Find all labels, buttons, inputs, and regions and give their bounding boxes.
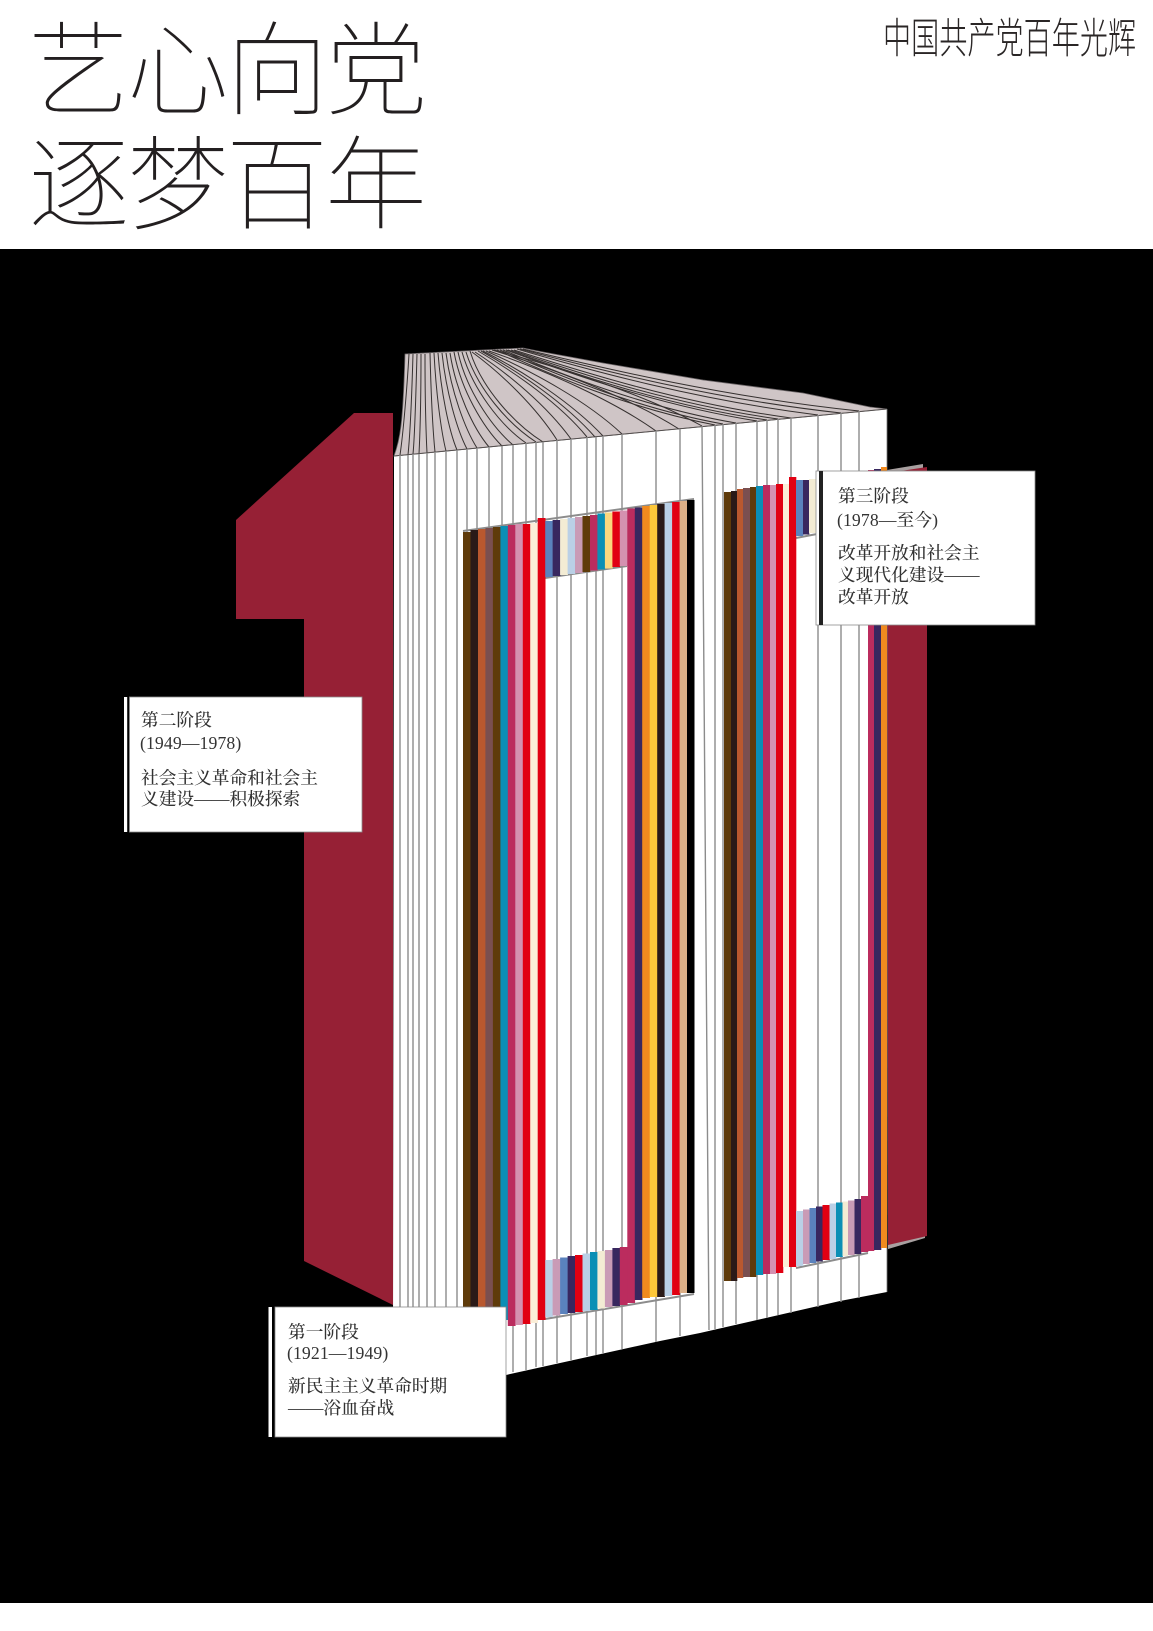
left zero striped numeral [463, 499, 694, 1326]
right zero: left column stripes [724, 477, 796, 1281]
callout: stage three: 改革开放 [838, 587, 909, 607]
callout: stage one: 第一阶段 [288, 1322, 359, 1342]
right zero striped numeral [724, 467, 887, 1281]
title: 艺心向党 [28, 15, 424, 129]
right zero: right column stripes [868, 467, 887, 1251]
book: curved page edges [400, 349, 859, 455]
callout: stage three [816, 471, 1035, 625]
title: 逐梦百年 [28, 129, 424, 243]
book: vertical page lines [400, 411, 859, 1400]
subtitle: 中国共产党百年光辉 [883, 15, 1136, 62]
callout: stage two: (1949—1978) [140, 733, 241, 753]
callout: stage one: ——浴血奋战 [287, 1398, 394, 1418]
right zero: bottom bar stripes [796, 1196, 868, 1266]
callout: stage one: (1921—1949) [287, 1343, 388, 1363]
title [28, 15, 424, 243]
callout: stage two: 义建设——积极探索 [141, 788, 301, 809]
left zero: left column stripes [463, 518, 546, 1326]
callout: stage three: (1978—至今) [837, 510, 938, 530]
book: right outline [886, 409, 888, 1292]
callout: stage two: 社会主义革命和社会主 [141, 768, 318, 788]
callout: stage three: 义现代化建设—— [838, 565, 980, 585]
right zero: edge shadows [796, 534, 868, 1268]
callout: stage three: 改革开放和社会主 [838, 543, 980, 563]
right zero: top bar stripes [796, 479, 817, 536]
left zero: top bar stripes [545, 510, 628, 577]
left zero: bottom bar stripes [545, 1247, 628, 1317]
callout: stage one [268, 1307, 506, 1437]
book: white front face [393, 409, 887, 1375]
book: top edge of the front face [394, 409, 887, 456]
callout: stage one: 新民主主义革命时期 [288, 1376, 448, 1396]
left zero: right column stripes [627, 500, 694, 1303]
book: top fan of pages [394, 348, 887, 456]
callout: stage three: 第三阶段 [838, 486, 909, 506]
red numeral 1 back shape [236, 413, 393, 1305]
red right side of the zero [887, 464, 927, 1249]
callout: stage two [124, 697, 362, 832]
book: page block [393, 348, 887, 1400]
callout: stage two: 第二阶段 [141, 710, 212, 730]
left zero: edge shadows [463, 499, 694, 1319]
